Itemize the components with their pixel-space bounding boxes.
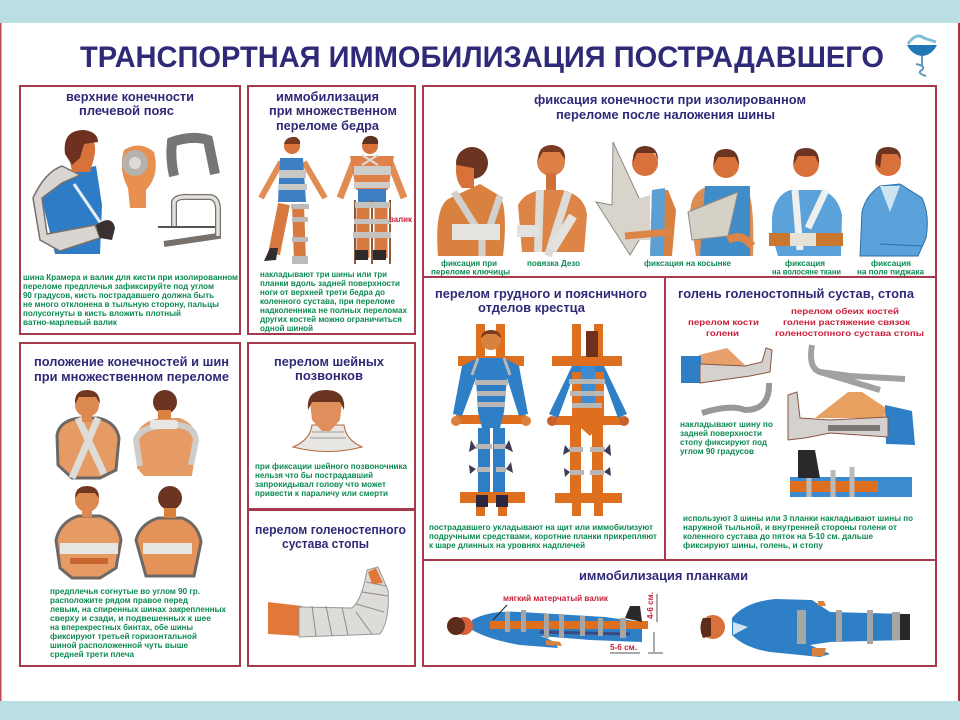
captions: fixation: повязка Дезо — [527, 259, 580, 268]
text: femur: ноги от верхней трети бедра до — [260, 287, 385, 297]
label: dimension 5-6: 5-6 см. — [610, 642, 637, 652]
figure: patient back on board — [547, 324, 629, 516]
text: limb position: сверху и сзади, и подвешенных к шее — [50, 614, 211, 623]
text: limb position: левым, на спиренных шинах закрепленных — [50, 605, 226, 614]
figure: horizontal band back — [136, 486, 201, 576]
subheading: one bone fracture: голени — [706, 328, 739, 338]
captions: fixation — [431, 259, 924, 276]
figure: front with splints — [340, 136, 413, 264]
figure: lying man with bands — [700, 599, 910, 657]
figure: front with tank top — [261, 137, 325, 264]
figure: leg on plank — [790, 450, 912, 497]
figure: man with arm splint — [33, 130, 115, 254]
heading: limb position: при множественном переломе — [34, 370, 229, 384]
figure: clavicle bandage — [437, 147, 505, 256]
figure: kerchief front — [688, 149, 753, 256]
text: leg splint — [680, 420, 773, 456]
figure: leg in splint — [681, 348, 772, 383]
figure: crossed splints front — [57, 390, 119, 478]
text: cervical: нельзя что бы пострадавший — [255, 470, 373, 480]
captions: fixation: на волосяне ткани — [772, 268, 841, 276]
text: cervical — [255, 462, 407, 498]
text: cervical: при фиксации шейного позвоночника — [255, 462, 407, 471]
panel: isolated limb fixation — [423, 86, 936, 277]
subheading: both bones fracture: голеностопного сустава стопы — [775, 328, 924, 338]
icon: upper splint — [171, 138, 215, 176]
text: femur: планки вдоль задней поверхности — [260, 279, 400, 288]
text: upper limbs: полусогнуты в кисть вложить плотный — [23, 309, 181, 318]
panel: thoracic and lumbar fracture — [423, 277, 665, 560]
subheading: both bones fracture: голени растяжение связок — [783, 317, 911, 327]
heading: femur: переломе бедра — [276, 119, 380, 133]
figure: bent leg — [788, 392, 915, 445]
heading: ankle: перелом голеностепного — [255, 523, 406, 537]
panel: ankle fracture — [248, 510, 415, 666]
text: three splints: коленного сустава до пяток на 5-10 см. дальше — [683, 532, 873, 541]
heading: cervical: позвонков — [295, 369, 363, 383]
text: upper limbs: 90 градусов, кисть пострадавшего должна быть — [23, 290, 214, 300]
captions: fixation: фиксация при — [441, 259, 497, 268]
heading: cervical — [274, 355, 384, 383]
panel: multiple femur fracture — [248, 86, 415, 334]
figure: Desault bandage — [517, 145, 587, 256]
heading: planks: иммобилизация планками — [579, 569, 748, 583]
text: three splints: фиксируют шины, голень, и стопу — [683, 541, 823, 550]
text: femur: надколенника не полных переломах — [260, 306, 407, 315]
text: femur: других костей можно ограничиться — [260, 315, 402, 324]
text: thoracic: подручными средствами, коротние планки прикрепляют — [429, 532, 657, 541]
text: upper limbs: шина Крамера и валик для кисти при изолированном — [23, 273, 238, 282]
text: leg splint: стопу фиксируют под — [680, 438, 768, 447]
heading: fixation: переломе после наложения шины — [556, 108, 775, 122]
text: thoracic — [429, 522, 657, 550]
text: thoracic: пострадавшего укладывают на щит или иммобилизуют — [429, 522, 653, 532]
heading: upper limbs: плечевой пояс — [79, 104, 174, 118]
icon: hand with roll — [122, 145, 156, 208]
text: limb position: на вперекрестных бинтах, обе шины — [50, 622, 193, 632]
heading: limb position: положение конечностей и шин — [34, 355, 229, 369]
heading: thoracic: перелом грудного и поясничного — [435, 287, 647, 301]
text: three splints — [683, 514, 913, 550]
heading: upper limbs: верхние конечности — [66, 90, 194, 104]
heading: cervical: перелом шейных — [274, 355, 384, 369]
figure: lying man with plank — [447, 606, 648, 648]
text: femur — [260, 270, 407, 333]
text: upper limbs — [23, 273, 238, 327]
text: femur: одной шиной — [260, 324, 313, 333]
label: soft roll — [493, 593, 609, 620]
subheading: one bone fracture — [688, 317, 759, 338]
heading: thoracic — [435, 287, 647, 315]
text: limb position: средней трети плеча — [50, 650, 134, 659]
panel: immobilization with planks — [423, 560, 936, 666]
text: limb position: шиной расположенной чуть выше — [50, 641, 188, 650]
captions: fixation: переломе ключицы — [431, 268, 510, 276]
title: ТРАНСПОРТНАЯ ИММОБИЛИЗАЦИЯ ПОСТРАДАВШЕГО — [80, 41, 884, 74]
text: three splints: используют 3 шины или 3 планки накладывают шины по — [683, 514, 913, 523]
figure: crossed splints back — [136, 390, 197, 476]
heading: ankle: сустава стопы — [282, 537, 369, 551]
captions: fixation: фиксация — [785, 259, 825, 268]
heading: fixation — [534, 93, 806, 122]
figure: splint on shirt — [769, 148, 843, 256]
label: dimension 4-6: 4-6 см. — [645, 592, 655, 619]
figure: head with collar — [293, 390, 362, 452]
text: cervical: привести к параличу или смерти — [255, 489, 388, 498]
heading: femur: иммобилизация — [276, 90, 379, 104]
text: limb position — [50, 587, 226, 659]
figure: patient front on board — [451, 324, 531, 516]
icon: leg splint — [702, 383, 769, 413]
icon: bowl of Hygieia — [907, 36, 937, 76]
label: soft roll: мягкий матерчатый валик — [503, 593, 609, 603]
icon: lower splint — [158, 197, 218, 244]
captions: fixation: фиксация — [871, 259, 911, 268]
panel: limb position in multiple fracture — [20, 343, 240, 666]
text: leg splint: накладывают шину по — [680, 420, 773, 429]
text: limb position: предплечья согнутые во углом 90 гр. — [50, 587, 200, 596]
text: cervical: запрокидывал голову что может — [255, 480, 386, 489]
text: limb position: фиксируют третьей горизонтальной — [50, 632, 197, 641]
figure: jacket — [860, 147, 927, 256]
heading: thoracic: отделов крестца — [478, 301, 586, 315]
heading: limb position — [34, 355, 229, 384]
panel: upper limbs — [20, 86, 240, 334]
text: leg splint: углом 90 градусов — [680, 447, 754, 456]
text: three splints: наружной тыльной, и внутренней стороны голени от — [683, 523, 897, 532]
captions: fixation: на поле пиджака — [857, 268, 924, 276]
text: upper limbs: переломе предплечья зафиксируйте под углом — [23, 282, 214, 291]
text: upper limbs: не много отклонена в тыльную сторону, пальцы — [23, 300, 219, 309]
subheading: both bones fracture: перелом обеих костей — [791, 306, 899, 316]
text: femur: накладывают три шины или три — [260, 270, 387, 279]
heading: ankle — [255, 523, 406, 551]
text: limb position: расположите рядом правое перед — [50, 596, 189, 605]
subheading: one bone fracture: перелом кости — [688, 317, 759, 327]
heading: upper limbs — [66, 90, 194, 118]
icon: large splint — [811, 345, 905, 390]
subheading: both bones fracture — [775, 306, 924, 338]
heading: fixation: фиксация конечности при изолированном — [534, 93, 806, 107]
figure: bandaged foot — [268, 567, 388, 637]
panel: shin, ankle, foot — [665, 277, 936, 560]
text: femur: коленного сустава, при переломе — [260, 297, 395, 306]
captions: fixation: фиксация на косынке — [644, 259, 731, 268]
heading: femur: при множественном — [269, 104, 397, 118]
heading: shin: голень голеностопный сустав, стопа — [678, 287, 915, 301]
figure: horizontal band front — [56, 486, 121, 578]
figure: kerchief — [596, 142, 676, 256]
heading: femur — [269, 90, 397, 133]
text: leg splint: задней поверхности — [680, 429, 762, 438]
label: roll: валик — [389, 214, 413, 224]
panel: cervical vertebrae — [248, 343, 415, 509]
label: dimension 5-6 — [610, 632, 663, 653]
text: upper limbs: ватно-марлевый валик — [23, 318, 118, 327]
text: thoracic: к шаре длинных на уровнях надплечей — [429, 541, 585, 550]
